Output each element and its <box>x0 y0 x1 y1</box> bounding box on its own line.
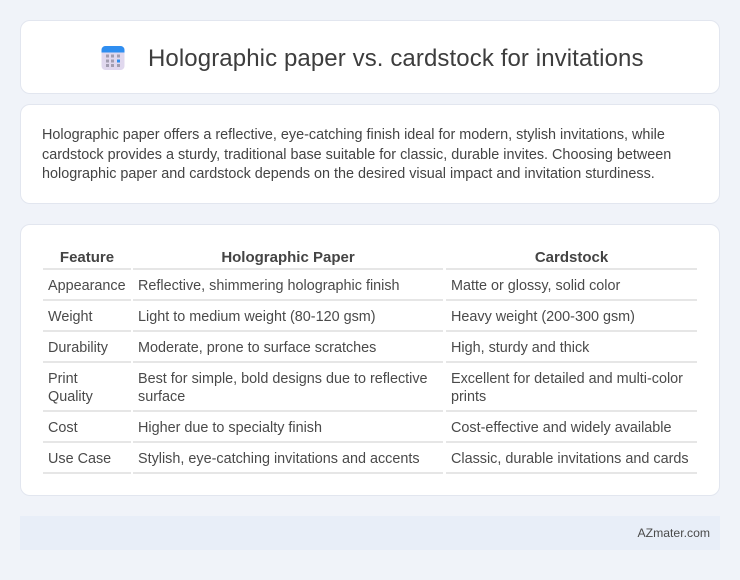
icon: calendar <box>102 46 124 70</box>
table: Higher due to specialty finish <box>138 420 322 436</box>
panel: comparison table <box>20 224 720 496</box>
title: Holographic paper vs. cardstock for invitations <box>148 45 644 72</box>
table: Reflective, shimmering holographic finish <box>138 278 400 294</box>
panel: title card <box>20 20 720 94</box>
table: Holographic Paper <box>221 249 355 266</box>
table: Moderate, prone to surface scratches <box>138 340 376 356</box>
table: Best for simple, bold designs due to reflective <box>138 371 428 387</box>
table: Print <box>48 371 78 387</box>
table: Cost-effective and widely available <box>451 420 672 436</box>
table: Feature <box>60 249 114 266</box>
row: print quality <box>48 371 683 405</box>
row: appearance <box>48 278 620 294</box>
table: Classic, durable invitations and cards <box>451 451 689 467</box>
table header <box>60 249 608 266</box>
table: surface <box>138 389 185 405</box>
row: weight <box>48 309 635 325</box>
table: Weight <box>48 309 93 325</box>
row: use case <box>48 451 689 467</box>
row: durability <box>48 340 590 356</box>
summary text: Holographic paper offers a reflective, eye-catching finish ideal for modern, stylish invitations, while <box>42 127 665 143</box>
row: cost <box>48 420 672 436</box>
footer credit: AZmater.com <box>638 526 710 540</box>
table: Cardstock <box>535 249 608 266</box>
table: Appearance <box>48 278 126 294</box>
table: Heavy weight (200-300 gsm) <box>451 309 635 325</box>
table: Matte or glossy, solid color <box>451 278 620 294</box>
table: Excellent for detailed and multi-color <box>451 371 683 387</box>
summary text: holographic paper and cardstock depends on the desired visual impact and invitation sturdiness. <box>42 166 655 182</box>
table: prints <box>451 389 486 405</box>
table: Cost <box>48 420 78 436</box>
table: Durability <box>48 340 108 356</box>
panel: summary <box>20 104 720 204</box>
summary text <box>42 127 671 182</box>
table: Quality <box>48 389 93 405</box>
footer bar <box>20 516 720 550</box>
table: Light to medium weight (80-120 gsm) <box>138 309 376 325</box>
table: High, sturdy and thick <box>451 340 589 356</box>
summary text: cardstock provides a sturdy, traditional base suitable for classic, durable invites. Choosing between <box>42 146 671 162</box>
table: Use Case <box>48 451 111 467</box>
table: Stylish, eye-catching invitations and accents <box>138 451 420 467</box>
